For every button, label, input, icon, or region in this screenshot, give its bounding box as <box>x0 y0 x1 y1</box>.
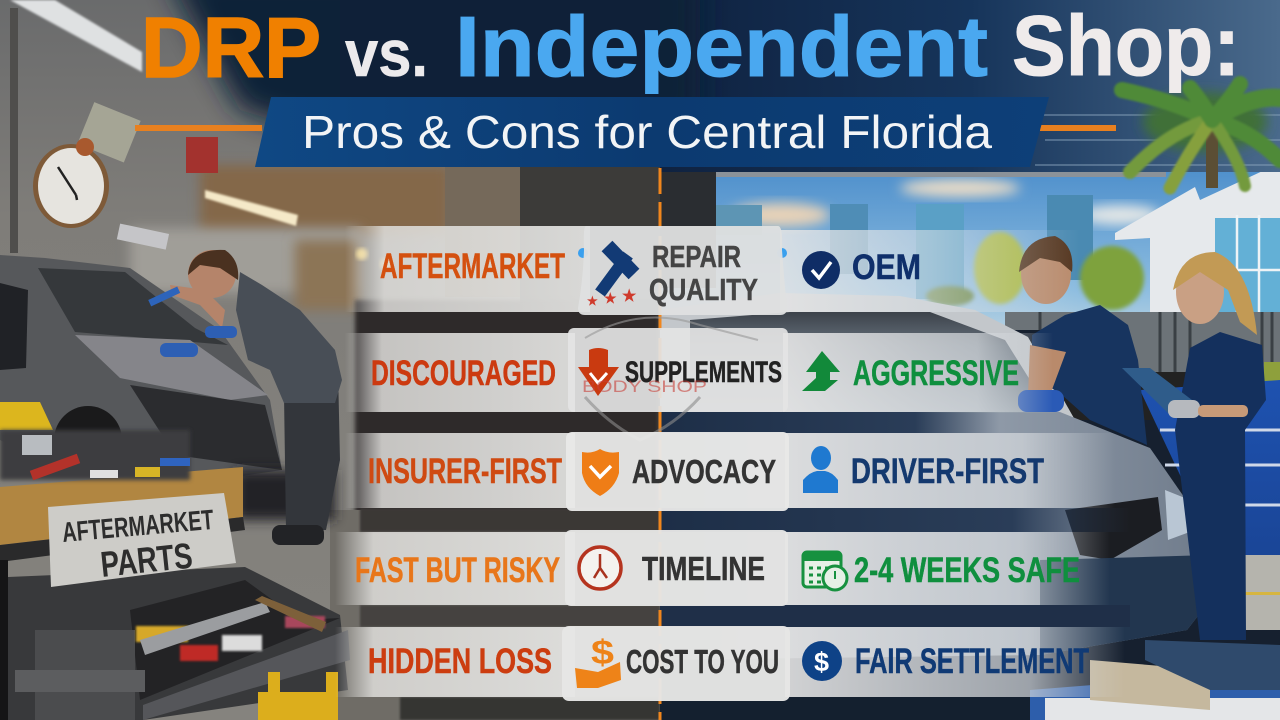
icon: hammer and wrench <box>587 246 637 308</box>
row 1: repair quality: AFTERMARKET <box>380 247 565 286</box>
background: silver car and floor <box>660 293 1280 720</box>
background: tool cart <box>0 560 350 720</box>
subtitle banner: Pros & Cons for Central Florida <box>302 106 992 158</box>
row 3: advocacy <box>345 432 1115 511</box>
icon: hammer and wrench: ★ <box>622 288 637 305</box>
icon: dollar and money stack: $ <box>591 634 614 672</box>
title <box>141 0 1240 96</box>
sign: aftermarket parts: PARTS <box>99 535 194 585</box>
row 5: cost to you: FAIR SETTLEMENT <box>855 642 1089 681</box>
background: boxes <box>1030 640 1280 720</box>
icon: calendar with stopwatch <box>803 552 847 590</box>
row 5: cost to you <box>335 626 1125 701</box>
row 1: repair quality: REPAIR <box>652 239 741 274</box>
icon: wall clock <box>33 138 109 228</box>
icon: check circle <box>802 251 840 289</box>
watermark: body shop shield <box>582 317 758 440</box>
row 5: cost to you: HIDDEN LOSS <box>368 642 552 681</box>
background: mechanic left <box>148 250 342 545</box>
row 1: repair quality <box>345 226 1080 315</box>
title: Shop: <box>1012 0 1240 94</box>
background: tool pile and cardboard box <box>0 402 245 562</box>
row 3: advocacy: ADVOCACY <box>632 453 776 490</box>
row 4: timeline <box>335 530 1110 606</box>
sign: aftermarket parts <box>48 493 236 587</box>
row 2: supplements <box>345 317 1053 440</box>
inspector <box>1122 252 1266 640</box>
icon: dollar and money stack <box>575 634 621 688</box>
fence <box>1005 312 1280 372</box>
row 4: timeline: TIMELINE <box>642 550 765 587</box>
icon: dollar circle: $ <box>814 647 829 677</box>
palms <box>926 232 1144 310</box>
row 2: supplements: AGGRESSIVE <box>853 354 1019 393</box>
palm tree top right <box>1122 84 1280 188</box>
row 2: supplements: SUPPLEMENTS <box>625 356 782 389</box>
row 5: cost to you: COST TO YOU <box>626 643 779 680</box>
sign: aftermarket parts: AFTERMARKET <box>61 504 215 548</box>
background: garage (left) <box>0 0 660 720</box>
icon: orange shield <box>582 449 619 496</box>
icon: up arrow <box>802 351 840 391</box>
row 4: timeline: FAST BUT RISKY <box>355 551 560 590</box>
background: Florida skyline (right) <box>660 0 1280 386</box>
row 2: supplements: DISCOURAGED <box>371 354 556 393</box>
top navy band <box>165 0 700 125</box>
row 3: advocacy: DRIVER-FIRST <box>851 452 1044 491</box>
icon: clock <box>579 547 621 589</box>
row 1: repair quality: OEM <box>852 248 921 287</box>
white building <box>1115 163 1280 340</box>
icon: hammer and wrench: ★ <box>587 294 598 308</box>
icon: driver person <box>803 446 838 493</box>
icon: hammer and wrench: ★ <box>604 290 617 306</box>
row 1: repair quality: QUALITY <box>649 272 758 307</box>
title: Independent <box>455 0 988 95</box>
background: mechanic right with inspector <box>1018 236 1266 640</box>
title: DRP <box>141 1 321 96</box>
title: vs. <box>345 16 428 90</box>
watermark: body shop shield: BODY SHOP <box>582 377 707 396</box>
subtitle banner <box>135 97 1116 167</box>
center divider <box>658 168 662 720</box>
row 3: advocacy: INSURER-FIRST <box>368 452 562 491</box>
row 4: timeline: 2-4 WEEKS SAFE <box>854 551 1080 590</box>
icon: down arrow shield <box>578 348 619 396</box>
navy soffit <box>660 0 1280 172</box>
background: damaged car <box>0 255 335 520</box>
icon: dollar circle <box>802 641 842 681</box>
